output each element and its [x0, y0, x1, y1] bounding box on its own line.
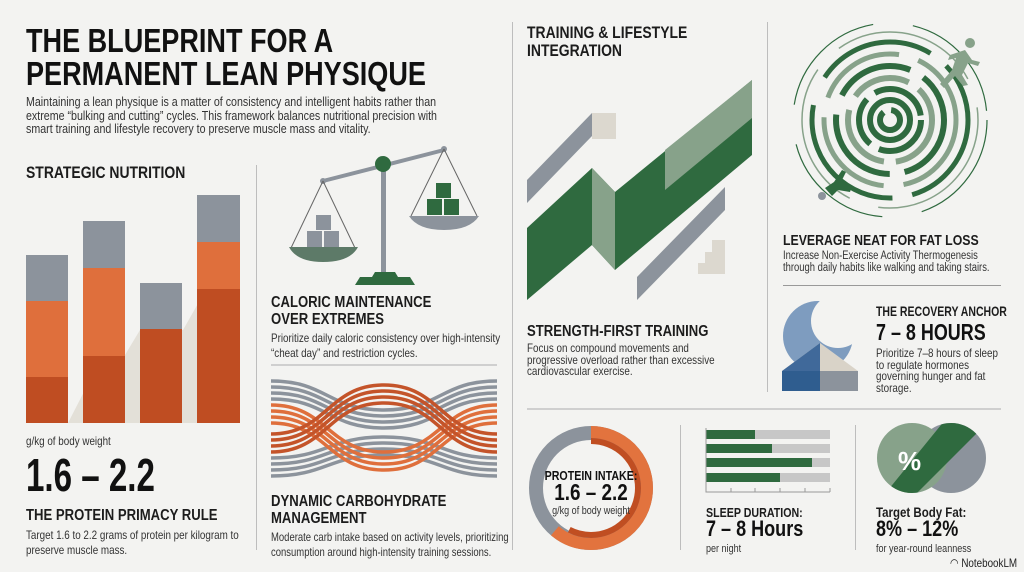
- text: recovery anchor: to regulate hormones: [876, 358, 969, 372]
- heading: training & lifestyle: [527, 23, 687, 60]
- intro text: extreme “bulking and cutting” cycles. This framework balances nutritional precision with: [26, 108, 437, 122]
- protein stat: preserve muscle mass.: [26, 543, 127, 557]
- text: caloric maintenance: [271, 294, 500, 360]
- text: strength-first training: cardiovascular exercise.: [527, 364, 633, 378]
- text: strength-first training: progressive overload rather than excessive: [527, 352, 715, 366]
- protein stat: [26, 434, 239, 557]
- heading: training & lifestyle: INTEGRATION: [527, 41, 622, 60]
- text: dynamic carbohydrate: [271, 493, 509, 559]
- text: recovery anchor: governing hunger and fat: [876, 369, 985, 383]
- text: target body fat: 8% – 12%: [876, 516, 958, 541]
- text: sleep duration stat: 7 – 8 Hours: [706, 516, 803, 541]
- title: [26, 22, 426, 92]
- protein stat: g/kg of body weight: [26, 434, 111, 448]
- intro text: [26, 94, 437, 136]
- protein stat: 1.6 – 2.2: [26, 449, 155, 501]
- text: sleep duration stat: [706, 505, 803, 555]
- intro text: Maintaining a lean physique is a matter of consistency and intelligent habits rather than: [26, 94, 436, 109]
- text: recovery anchor: storage.: [876, 380, 912, 394]
- heading: training & lifestyle: TRAINING & LIFESTYLE: [527, 23, 687, 42]
- text: sleep duration stat: per night: [706, 543, 741, 555]
- donut chart: protein intake: PROTEIN INTAKE:: [545, 468, 637, 483]
- protein stat: Target 1.6 to 2.2 grams of protein per kilogram to: [26, 528, 239, 542]
- donut chart: protein intake: 1.6 – 2.2: [554, 479, 628, 505]
- text: strength-first training: Focus on compound movements and: [527, 341, 689, 355]
- text: caloric maintenance: OVER EXTREMES: [271, 311, 384, 328]
- text: dynamic carbohydrate: MANAGEMENT: [271, 510, 366, 527]
- title: THE BLUEPRINT FOR A: [26, 22, 333, 59]
- icon: moon recovery: [782, 301, 858, 391]
- text: recovery anchor: [876, 303, 1007, 394]
- title: PERMANENT LEAN PHYSIQUE: [26, 55, 426, 92]
- text: recovery anchor: Prioritize 7–8 hours of sleep: [876, 346, 998, 360]
- text: sleep duration stat: SLEEP DURATION:: [706, 505, 803, 520]
- text: dynamic carbohydrate: DYNAMIC CARBOHYDRATE: [271, 493, 446, 510]
- bar chart: sleep duration: [706, 428, 830, 492]
- text: target body fat: for year-round leanness: [876, 543, 971, 555]
- bar chart: stacked bars: [26, 195, 240, 423]
- text: target body fat: [876, 504, 971, 555]
- chart: rising strength graphic: [527, 80, 752, 300]
- heading: strategic nutrition: STRATEGIC NUTRITION: [26, 163, 185, 182]
- donut chart: protein intake: g/kg of body weight: [552, 505, 630, 517]
- text: target body fat: Target Body Fat:: [876, 504, 966, 520]
- icon: body fat percent circles: %: [898, 446, 921, 476]
- logo: NotebookLM: ◠ NotebookLM: [950, 556, 1017, 570]
- text: strength-first training: STRENGTH-FIRST TRAINING: [527, 323, 708, 340]
- icon: body fat percent circles: [877, 423, 986, 493]
- icon: interwoven carb waves: [271, 379, 497, 478]
- icon: NEAT maze circle with runners: [794, 24, 988, 218]
- intro text: smart training and lifestyle recovery to preserve muscle mass and vitality.: [26, 121, 371, 136]
- text: leverage NEAT: Increase Non-Exercise Activity Thermogenesis: [783, 250, 978, 262]
- text: caloric maintenance: CALORIC MAINTENANCE: [271, 294, 431, 311]
- text: dynamic carbohydrate: consumption around high-intensity training sessions.: [271, 545, 491, 559]
- donut chart: protein intake: [529, 426, 653, 550]
- text: leverage NEAT: LEVERAGE NEAT FOR FAT LOSS: [783, 232, 979, 249]
- text: caloric maintenance: “cheat day” and restriction cycles.: [271, 346, 418, 360]
- text: recovery anchor: THE RECOVERY ANCHOR: [876, 303, 1007, 319]
- icon: balance scale: [289, 146, 479, 285]
- text: leverage NEAT: through daily habits like walking and taking stairs.: [783, 262, 990, 274]
- protein stat: THE PROTEIN PRIMACY RULE: [26, 507, 217, 524]
- text: caloric maintenance: Prioritize daily caloric consistency over high-intensity: [271, 331, 500, 345]
- text: leverage NEAT: [783, 232, 990, 274]
- text: recovery anchor: 7 – 8 HOURS: [876, 319, 986, 345]
- text: strength-first training: [527, 323, 715, 378]
- text: dynamic carbohydrate: Moderate carb intake based on activity levels, prioritizing: [271, 530, 509, 544]
